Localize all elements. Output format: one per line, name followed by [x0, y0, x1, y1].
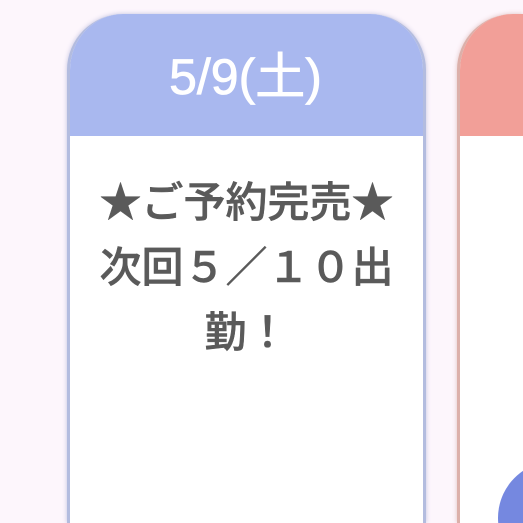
header: blue date band: [67, 14, 426, 136]
text block: booking status message: [99, 179, 394, 356]
header: red date band: [457, 14, 523, 136]
icon: round blue floating button: [498, 471, 523, 523]
panel: schedule card 5/9: [67, 14, 426, 523]
text block: booking status message: 勤！: [204, 309, 288, 356]
heading: date: 5/9(土): [169, 49, 322, 105]
text block: booking status message: ★ご予約完売★: [99, 179, 394, 226]
text block: booking status message: 次回５／１０出: [99, 244, 394, 291]
panel: next schedule card: [457, 14, 523, 523]
